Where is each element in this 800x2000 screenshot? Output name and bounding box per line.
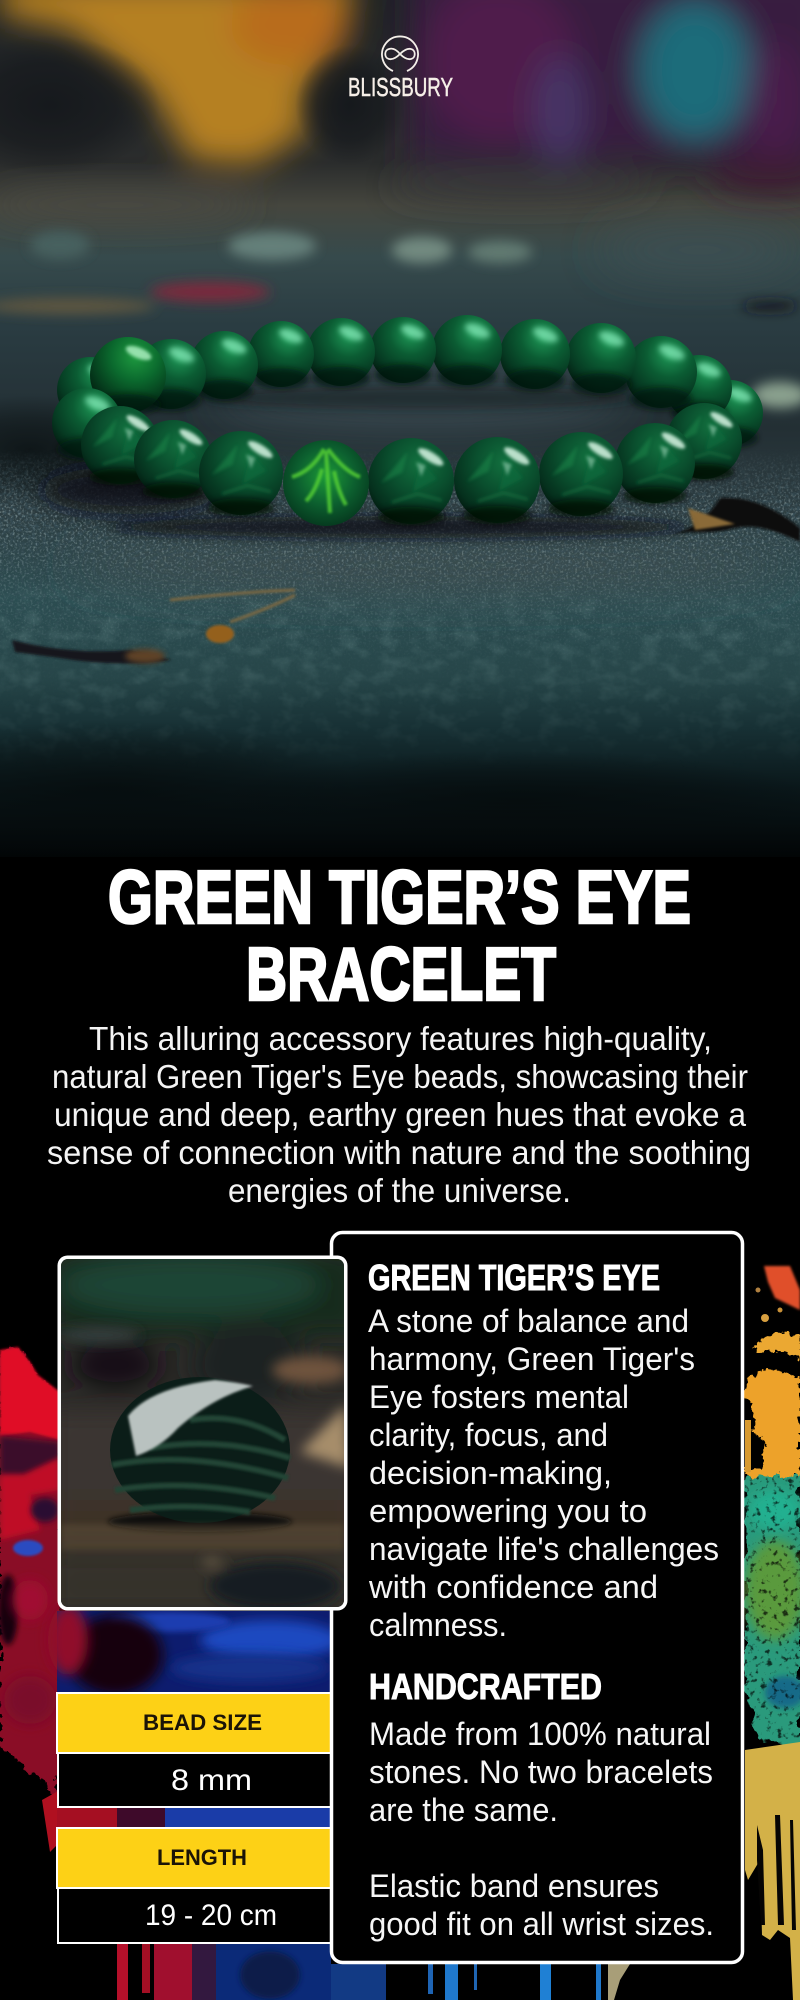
- heading: handcrafted: HANDCRAFTED: [369, 1666, 602, 1707]
- text: stone description: clarity, focus, and: [369, 1417, 608, 1453]
- bead size row: 8 mm: [171, 1764, 252, 1797]
- blurred mottling: [0, 602, 796, 735]
- logo: Blissbury: [348, 36, 453, 102]
- orange body: [745, 1368, 800, 1476]
- text: handcrafted description: [369, 1716, 714, 1942]
- paint splash: left red and blue: [0, 1347, 340, 1852]
- polished stone: [108, 1377, 292, 1532]
- text: stone description: [368, 1303, 719, 1643]
- length row: 19 - 20 cm: [145, 1899, 277, 1932]
- text: handcrafted description: Elastic band ensures: [369, 1868, 659, 1904]
- text: handcrafted description: stones. No two bracelets: [369, 1754, 713, 1790]
- title: [108, 855, 691, 1016]
- text: handcrafted description: Made from 100% natural: [369, 1716, 711, 1752]
- text: handcrafted description: good fit on all wrist sizes.: [369, 1906, 714, 1942]
- specs table: [57, 1693, 332, 1943]
- text: stone description: with confidence and: [368, 1569, 658, 1605]
- paint drips: bottom: [117, 1943, 630, 2000]
- cracks and rust: [12, 498, 800, 664]
- title: BRACELET: [246, 932, 556, 1016]
- stone photo: [50, 1250, 360, 1615]
- intro paragraph: [47, 1020, 751, 1209]
- stone grain texture: [0, 456, 800, 652]
- back beads: [57, 315, 763, 448]
- splash between photo and table: [57, 1611, 332, 1695]
- bright centre bead: [283, 440, 369, 526]
- heading: green tiger's eye: GREEN TIGER’S EYE: [368, 1257, 660, 1298]
- bracelet shadow: [110, 516, 690, 538]
- text: stone description: calmness.: [369, 1607, 507, 1643]
- text: stone description: A stone of balance and: [368, 1303, 689, 1339]
- textured ground: [61, 1524, 344, 1550]
- paint splash: right orange, teal and yellow drips: [745, 1266, 800, 2000]
- logo: Blissbury: BLISSBURY: [348, 72, 453, 102]
- hero photo: green tiger's eye bracelet on stone: [0, 0, 800, 860]
- teal and green band: [745, 1474, 800, 1752]
- yellow drips: [745, 1742, 800, 2000]
- length row: LENGTH: [157, 1845, 247, 1870]
- length row: [57, 1828, 332, 1943]
- text: stone description: Eye fosters mental: [369, 1379, 629, 1415]
- text: stone description: harmony, Green Tiger's: [369, 1341, 695, 1377]
- front beads: [52, 388, 742, 526]
- text: stone description: decision-making,: [369, 1455, 612, 1491]
- strip between the two tables: [57, 1807, 117, 1829]
- text: stone description: empowering you to: [369, 1493, 647, 1529]
- bead size row: [57, 1693, 332, 1807]
- intro paragraph: This alluring accessory features high-quality,: [89, 1020, 712, 1057]
- text: stone description: navigate life's challenges: [369, 1531, 719, 1567]
- bead size row: BEAD SIZE: [143, 1710, 262, 1735]
- intro paragraph: unique and deep, earthy green hues that evoke a: [54, 1096, 747, 1133]
- panel: stone details: [332, 1232, 742, 1962]
- intro paragraph: energies of the universe.: [228, 1172, 571, 1209]
- intro paragraph: sense of connection with nature and the soothing: [47, 1134, 751, 1171]
- bracelet beads: [52, 315, 763, 526]
- text: handcrafted description: are the same.: [369, 1792, 558, 1828]
- intro paragraph: natural Green Tiger's Eye beads, showcasing their: [52, 1058, 748, 1095]
